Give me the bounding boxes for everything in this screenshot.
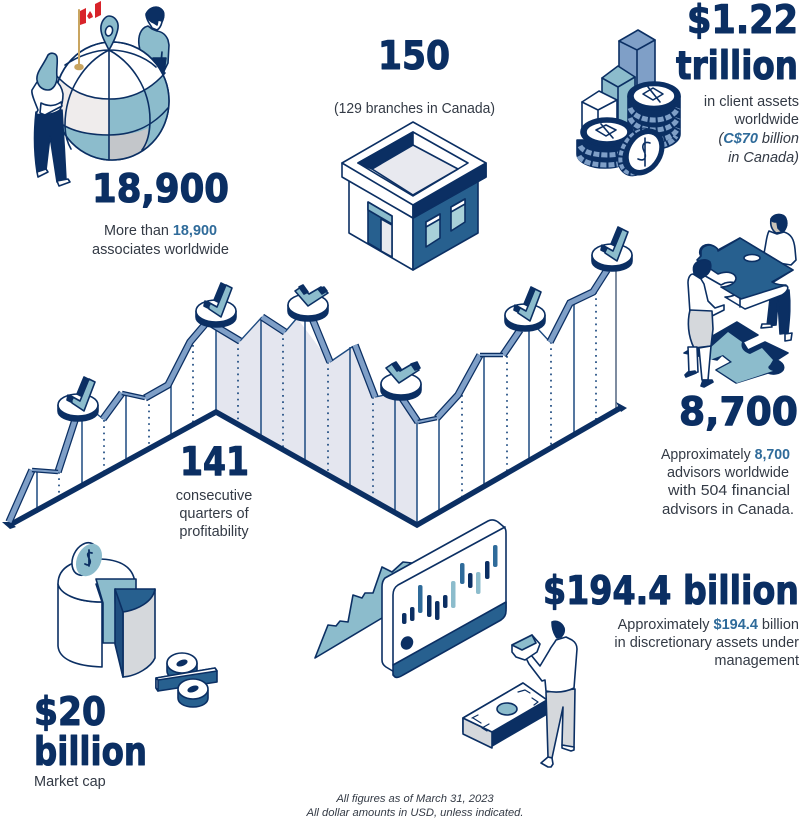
stat: 141 quarters of profitability: [176, 440, 252, 540]
footnote: [305, 793, 524, 819]
icon: puzzle and two people: [684, 214, 796, 387]
stat: 8,700 advisors: [661, 390, 798, 518]
stat: 150 branches: [334, 34, 495, 117]
stat: $194.4 billion discretionary assets: in discretionary assets under: [614, 635, 799, 651]
stat: 8,700 advisors: 8,700: [679, 390, 798, 435]
icon: market cap cylinder: [58, 539, 155, 677]
stat: 8,700 advisors: Approximately 8,700: [661, 447, 790, 463]
stat: 150 branches: 150: [378, 34, 450, 79]
stat: 18,900 associates: 18,900: [92, 167, 229, 212]
icon: globe with people and flag: [32, 1, 170, 186]
stat: 18,900 associates: More than 18,900: [104, 223, 217, 239]
globe: [50, 42, 170, 164]
stat: 150 branches: (129 branches in Canada): [334, 101, 495, 117]
icon: percent symbol: [156, 653, 217, 707]
footnote: All figures as of March 31, 2023: [335, 793, 494, 805]
stat: 8,700 advisors: advisors in Canada.: [662, 502, 794, 518]
stat: $1.22 trillion client assets: worldwide: [734, 112, 799, 128]
stat: 8,700 advisors: advisors worldwide: [667, 465, 789, 481]
stat: 18,900 associates: associates worldwide: [92, 242, 229, 258]
stat: 141 quarters of profitability: quarters of: [179, 506, 250, 522]
line chart: 141 quarters: [2, 227, 632, 529]
stat: 141 quarters of profitability: profitability: [179, 524, 249, 540]
stat: $1.22 trillion client assets: (C$70 billion: [718, 131, 799, 147]
stat: 18,900 associates: [92, 167, 229, 258]
stat: 8,700 advisors: with 504 financial: [667, 483, 790, 499]
stat: $20 billion market cap: Market cap: [34, 774, 106, 790]
icon: man with banknotes: [463, 621, 577, 767]
footnote: All dollar amounts in USD, unless indicated.: [305, 807, 524, 819]
stat: $1.22 trillion client assets: in Canada): [728, 150, 799, 166]
stat: 141 quarters of profitability: 141: [180, 440, 249, 485]
stat: $194.4 billion discretionary assets: [543, 569, 799, 669]
icon: client asset bars and coins: [577, 30, 680, 183]
stat: $194.4 billion discretionary assets: Approximately $194.4 billion: [618, 617, 799, 633]
stat: $194.4 billion discretionary assets: management: [714, 653, 799, 669]
chart base: [8, 407, 622, 526]
stat: $20 billion market cap: $20: [34, 690, 106, 735]
milestone markers: [58, 227, 632, 421]
flag: [75, 1, 101, 70]
ribbon line: [9, 270, 607, 522]
shaded chart wall: [216, 317, 417, 525]
icon: tablet with trading chart: [315, 520, 506, 677]
man: [771, 214, 787, 233]
stat: $1.22 trillion client assets: [676, 0, 799, 166]
stat: 141 quarters of profitability: consecutive: [176, 488, 252, 504]
icon: branch building: [342, 122, 486, 270]
map pin: [101, 16, 118, 50]
woman: [693, 260, 711, 280]
man behind globe: [139, 7, 169, 78]
chart verticals and thin edges: [37, 303, 574, 525]
bottom puzzle slot: [684, 322, 788, 383]
stat: $20 billion market cap: [34, 690, 147, 790]
stat: $20 billion market cap: billion: [34, 730, 147, 775]
stat: $1.22 trillion client assets: in client assets: [704, 94, 799, 110]
woman: [32, 53, 70, 186]
top puzzle piece: [700, 238, 793, 309]
